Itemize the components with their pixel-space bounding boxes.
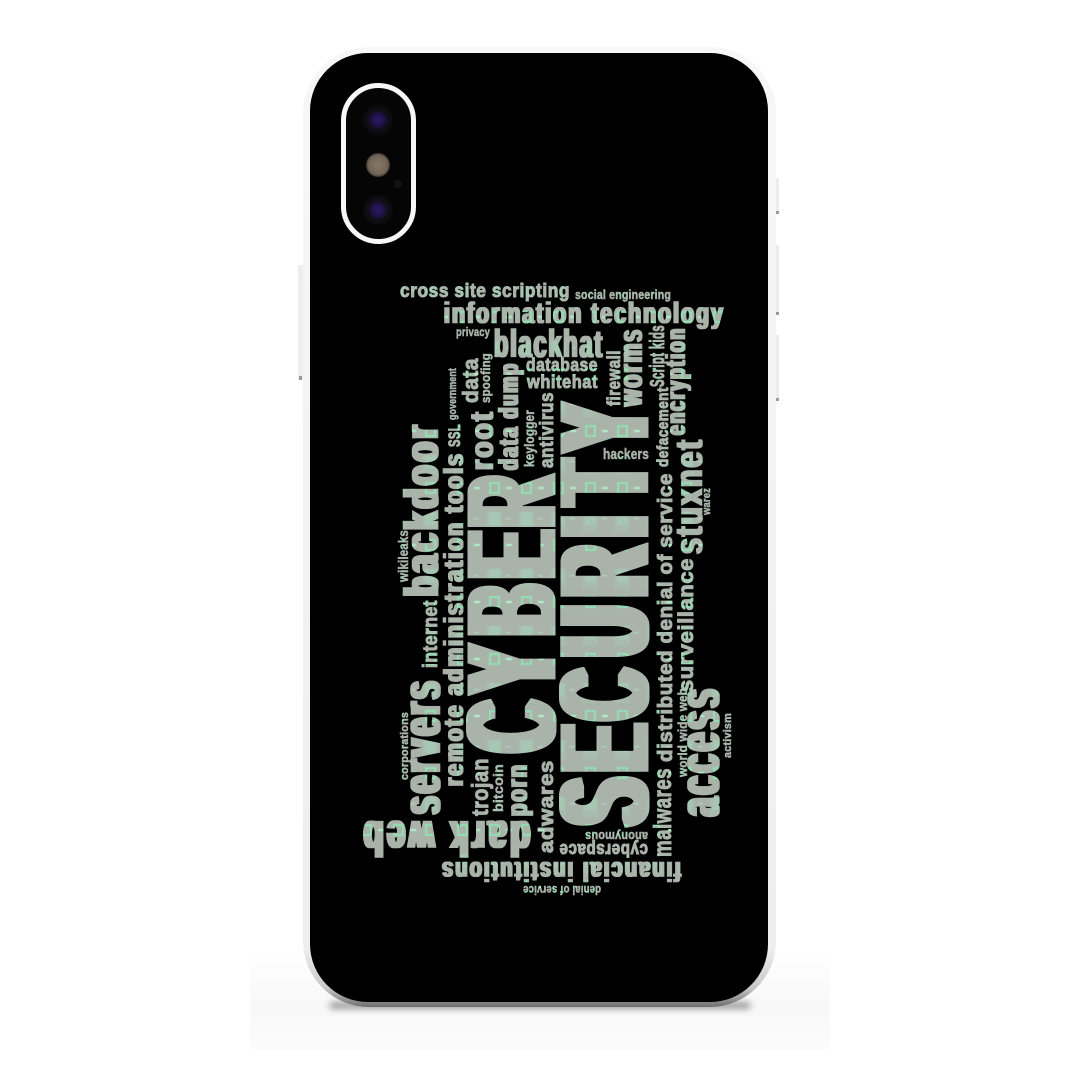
icon: microphone dot — [394, 180, 402, 188]
word: data dump: data dump — [493, 362, 524, 470]
camera module — [344, 86, 414, 242]
word: spoofing: spoofing — [478, 353, 493, 403]
word: keylogger: keylogger — [521, 410, 537, 467]
word: dark web: dark web — [360, 810, 530, 866]
word: anonymous: anonymous — [585, 829, 648, 844]
word: government: government — [447, 368, 459, 420]
word: internet: internet — [420, 600, 442, 668]
word: financial institutions: financial institutions — [440, 856, 681, 887]
large word: CYBER: CYBER — [442, 477, 582, 751]
word: social engineering: social engineering — [575, 288, 671, 302]
camera pill outline — [344, 86, 414, 242]
phone back black surface — [310, 53, 768, 1002]
word: adwares: adwares — [536, 760, 558, 853]
floor shadow — [250, 950, 830, 1050]
word: wikileaks: wikileaks — [395, 530, 411, 583]
word: worms: worms — [612, 328, 650, 407]
word: firewall: firewall — [604, 350, 624, 406]
word: hackers: hackers — [603, 447, 649, 463]
word: activism: activism — [722, 713, 734, 758]
icon: flash — [366, 153, 390, 177]
word: warez: warez — [701, 488, 713, 516]
word: surveillance: surveillance — [675, 558, 698, 692]
word: privacy: privacy — [456, 327, 490, 339]
word: servers: servers — [390, 678, 452, 814]
word: defacement: defacement — [655, 387, 672, 467]
word: backdoor: backdoor — [396, 422, 449, 596]
word: bitcoin: bitcoin — [491, 764, 506, 812]
word: database: database — [526, 355, 598, 375]
word: encryption: encryption — [660, 327, 691, 435]
word: remote administration tools: remote administration tools — [438, 452, 469, 786]
icon: top lens — [363, 105, 393, 135]
word: information technology: information technology — [444, 297, 725, 330]
word: access: access — [667, 686, 732, 816]
word: denial of service: denial of service — [523, 883, 601, 895]
phone side buttons — [298, 178, 779, 401]
large word: SECURITY: SECURITY — [535, 405, 675, 824]
word: cyberspace: cyberspace — [559, 840, 648, 860]
word: data: data — [458, 358, 483, 403]
icon: bottom lens — [363, 195, 393, 225]
word: distributed denial of service: distributed denial of service — [655, 473, 677, 762]
word: whitehat: whitehat — [526, 372, 598, 392]
word: antivirus: antivirus — [537, 392, 558, 468]
word: script kids: Script kids — [647, 325, 669, 387]
word: SSL: SSL — [445, 424, 464, 447]
word: trojan: trojan — [467, 758, 493, 816]
word: corporations: corporations — [399, 712, 411, 780]
word: blackhat: blackhat — [494, 323, 604, 366]
word: root: root — [463, 410, 500, 470]
phone body frame — [303, 47, 776, 1007]
word: world wide web: world wide web — [675, 688, 690, 778]
word: stuxnet: stuxnet — [668, 438, 711, 554]
word: malwares: malwares — [649, 768, 677, 857]
word cloud — [360, 281, 734, 895]
green matrix texture over the words — [345, 275, 740, 900]
small words — [360, 281, 734, 895]
word: cross site scripting: cross site scripting — [400, 281, 570, 302]
word: porn: porn — [501, 763, 534, 816]
